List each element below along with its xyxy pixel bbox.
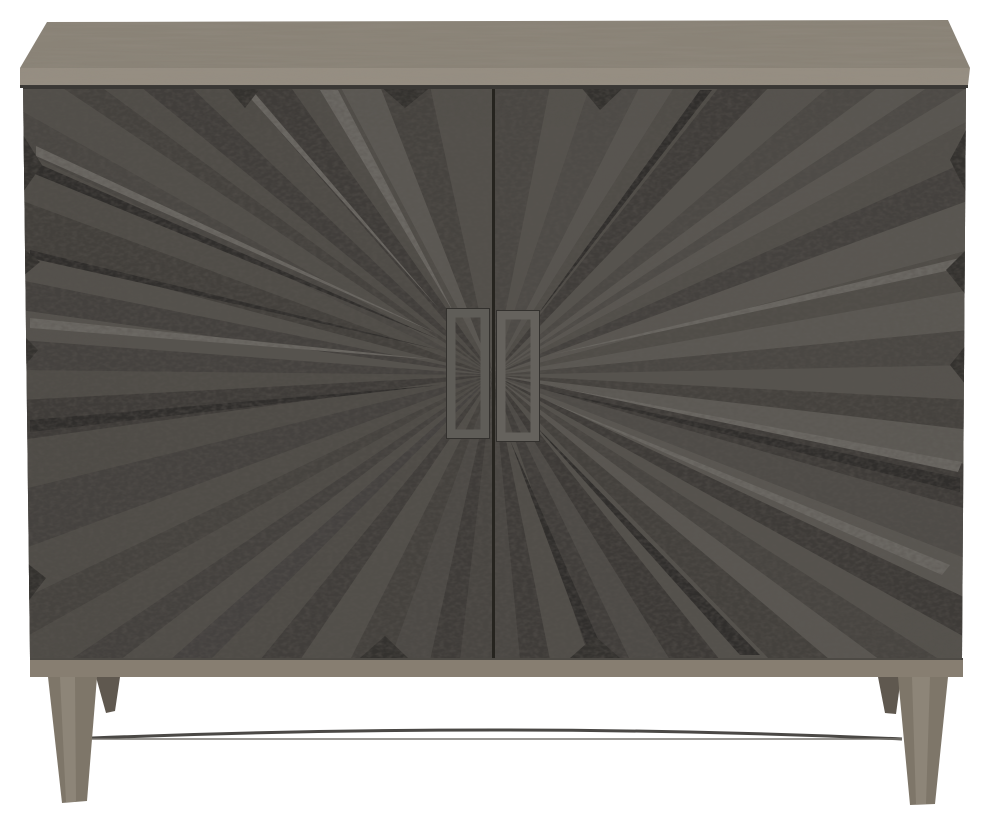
bottom rail: [30, 658, 963, 677]
left door rays: [20, 86, 493, 660]
left door handle: [446, 308, 490, 438]
raised ray highlights: [30, 90, 962, 575]
back legs: [96, 677, 901, 714]
metal stretcher: [92, 730, 902, 739]
cabinet body with sunburst doors: [20, 86, 970, 661]
right door handle: [496, 310, 540, 442]
front legs: [48, 677, 948, 805]
wood grain texture: [20, 86, 970, 661]
door centre seam: [492, 86, 495, 658]
shadow grooves: [30, 90, 960, 655]
cabinet top: [20, 20, 970, 88]
right door rays: [493, 86, 970, 660]
door top trim: [23, 86, 966, 89]
door edge notches: [23, 86, 966, 658]
